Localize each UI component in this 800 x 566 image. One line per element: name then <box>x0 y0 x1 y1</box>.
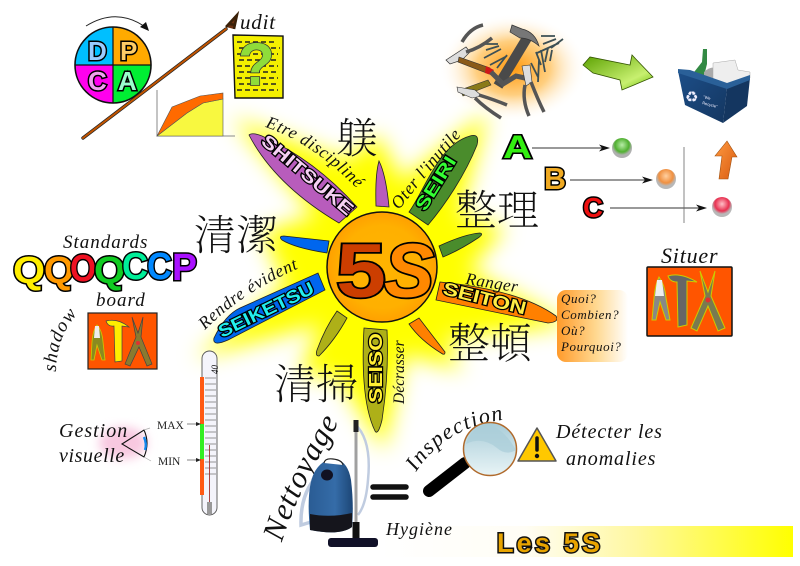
ray: SEITON <box>436 278 557 323</box>
letter A: A <box>503 129 532 165</box>
label: Ranger: Ranger <box>463 269 520 296</box>
ray: small olive <box>316 311 347 356</box>
label: Hygiène: Hygiène <box>385 519 453 539</box>
left bottom plier <box>460 80 491 96</box>
QQOQCCP: Q <box>44 250 74 292</box>
arrow: to recycle bin <box>583 55 653 90</box>
sun label 5S: S <box>384 229 434 314</box>
nails <box>484 36 563 82</box>
label: Standards: Standards <box>63 232 148 253</box>
callout: questions: Pourquoi? <box>560 339 622 354</box>
kanji: seiri: 整理 <box>455 189 539 235</box>
hammer <box>498 38 527 86</box>
PDCA wheel: A <box>118 66 137 96</box>
label: Détecter les anomalies <box>555 421 663 470</box>
ray: SHITSUKE: SHITSUKE <box>257 131 358 219</box>
ray: SEISO <box>363 328 387 432</box>
callout: questions <box>557 290 628 362</box>
label: Audit: udit <box>240 10 276 34</box>
ray: SEIRI: SEIRI <box>411 153 460 214</box>
ray: SEIRI <box>409 135 478 225</box>
recycling bin: "We <box>703 94 712 101</box>
kanji: seiketsu: 清潔 <box>194 214 278 260</box>
label: MAX: MAX <box>157 420 185 432</box>
question box: ? <box>238 31 275 98</box>
ray: SHITSUKE <box>249 131 358 223</box>
label: Gestion visuelle: visuelle <box>59 445 125 467</box>
label: Nettoyage: Nettoyage <box>264 416 336 543</box>
ray: small purple <box>376 161 389 207</box>
title banner <box>380 526 793 558</box>
board: Situer tools <box>647 267 732 336</box>
label: Gestion visuelle <box>59 420 128 467</box>
QQOQCCP: Q <box>13 250 45 292</box>
label: Détecter les anomalies: anomalies <box>566 448 656 470</box>
icon: magnifier <box>429 422 516 491</box>
letter C: C <box>583 192 603 223</box>
label: Oter l'inutile: Oter l'inutile <box>393 130 460 208</box>
arrow: up orange <box>715 141 737 179</box>
kanji: shitsuke: 躾 <box>336 117 378 163</box>
QQOQCCP <box>13 246 197 292</box>
ABC rows <box>503 129 732 223</box>
thermometer <box>157 351 220 515</box>
label: MAX <box>157 420 201 432</box>
equals sign <box>373 487 406 497</box>
recycling bin: ♻ <box>685 88 698 106</box>
arrow: PDCA rotation <box>86 17 148 29</box>
label: Etre discipliné: Etre discipliné <box>264 116 366 187</box>
label: Inspection: Inspection <box>406 410 502 472</box>
label: shadow: shadow <box>44 308 75 372</box>
sun label 5S <box>336 229 434 314</box>
callout: questions: Quoi? <box>561 291 596 306</box>
label: MIN: MIN <box>158 456 181 468</box>
label: Situer: Situer <box>661 243 718 268</box>
ray: SEIKETSU <box>214 273 325 343</box>
icon: warning <box>518 428 556 461</box>
QQOQCCP: C <box>147 246 172 288</box>
sun disc <box>327 212 437 322</box>
ray: SEIKETSU: SEIKETSU <box>215 278 317 342</box>
tools pile <box>439 14 587 122</box>
ramp line <box>83 15 237 138</box>
recycling bin <box>678 49 750 123</box>
icon: vacuum cleaner <box>301 420 378 547</box>
QQOQCCP: Q <box>94 250 125 292</box>
pink glow behind eye <box>99 427 147 459</box>
label: board: board <box>96 290 146 311</box>
panel: sun rays and centre <box>214 131 557 432</box>
dots <box>612 138 632 158</box>
ray: SEITON: SEITON <box>441 278 528 318</box>
ray: small orange <box>409 318 445 354</box>
thermometer: 40 <box>210 364 220 374</box>
recycling bin: Recycle" <box>702 100 719 109</box>
label: Décrasser: Décrasser <box>391 339 408 405</box>
ray: small green <box>439 233 482 257</box>
callout: questions: Combien? <box>561 307 619 322</box>
sun label 5S: 5 <box>336 229 386 314</box>
left top plier <box>446 47 470 64</box>
arrows <box>532 148 705 208</box>
right plier <box>522 65 532 86</box>
label: MIN <box>158 456 201 468</box>
kanji: seiton: 整頓 <box>448 322 532 368</box>
PDCA wheel: C <box>88 66 107 96</box>
ray: SEISO: SEISO <box>366 333 386 403</box>
PDCA wheel: P <box>120 36 137 66</box>
ray: small blue <box>280 236 329 253</box>
PDCA wheel: D <box>88 36 107 66</box>
icon: eye <box>122 428 151 461</box>
title banner: Les 5S <box>497 528 600 558</box>
letter B: B <box>544 161 566 196</box>
area chart <box>157 90 235 136</box>
label: Détecter les anomalies: Détecter les <box>555 421 663 443</box>
QQOQCCP: C <box>122 246 148 288</box>
QQOQCCP: P <box>172 247 197 289</box>
threshold <box>683 147 685 223</box>
label: Rendre évident: Rendre évident <box>198 260 298 330</box>
label: Gestion visuelle: Gestion <box>59 420 128 442</box>
PDCA wheel <box>75 17 151 103</box>
sun glow <box>195 112 570 450</box>
board: shadow board <box>88 313 157 369</box>
callout: questions: Où? <box>561 323 585 338</box>
QQOQCCP: O <box>70 248 96 290</box>
kanji: seiso: 清掃 <box>274 363 358 409</box>
